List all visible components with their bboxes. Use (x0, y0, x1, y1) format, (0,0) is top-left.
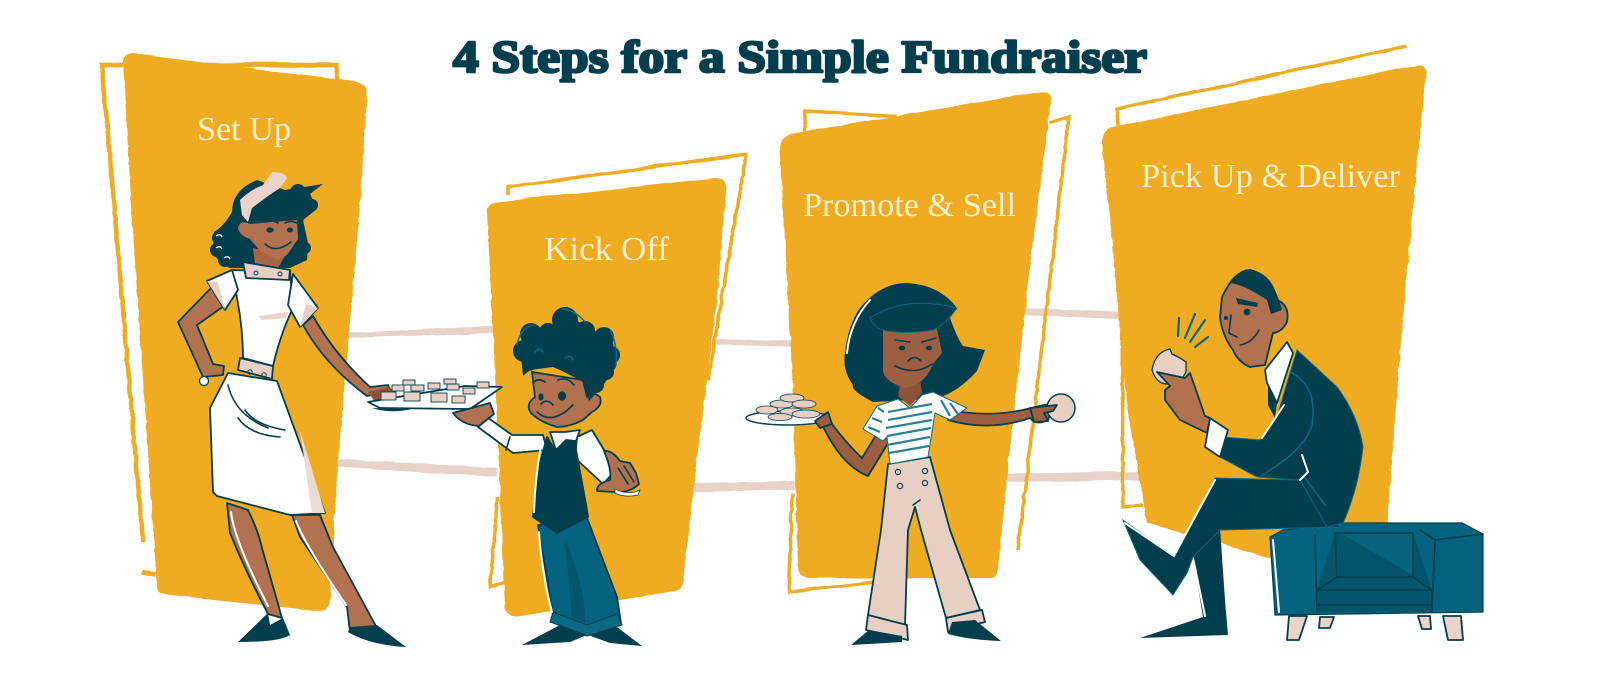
striped shirt (863, 392, 967, 464)
boy's facial features (533, 379, 574, 418)
girl's facial features (895, 338, 936, 371)
man's facial features (1224, 298, 1259, 345)
raised leg and shoe (1123, 478, 1340, 595)
character: man in suit on bench (1123, 270, 1483, 640)
woman's facial features (263, 221, 297, 249)
fringe hair (253, 192, 310, 222)
gold panel (1102, 65, 1426, 558)
bodice (232, 270, 293, 366)
gold panel (487, 178, 726, 617)
label: Pick Up and Deliver: Pick Up & Deliver (1141, 158, 1401, 195)
short hair (1222, 270, 1282, 314)
jacket (1220, 350, 1363, 527)
legs (227, 503, 282, 618)
shirt collar (1265, 342, 1293, 403)
gold panel (123, 53, 367, 611)
label: Promote and Sell: Promote & Sell (803, 187, 1016, 224)
raised arm sleeve (478, 417, 547, 453)
title: 4 Steps for a Simple Fundraiser (453, 32, 1147, 82)
collar (243, 262, 290, 280)
fringe (870, 303, 957, 332)
supporting leg and shoe (1140, 528, 1228, 638)
hand (1157, 372, 1210, 433)
label: Kick Off: Kick Off (544, 231, 670, 268)
brush frame (490, 154, 746, 587)
cookie in hand (1047, 394, 1075, 422)
brush frame (789, 111, 1069, 592)
panel: Kick Off (487, 154, 746, 617)
tray hand (368, 387, 396, 402)
bench (1270, 523, 1483, 640)
arm holding plate (820, 420, 890, 476)
motion lines by the cookie (1178, 314, 1208, 347)
right sleeve (575, 430, 616, 484)
connecting pink brush bands (336, 308, 1142, 492)
pants (538, 518, 621, 632)
head (1220, 270, 1288, 367)
brush frame (1117, 46, 1407, 507)
sleeves (207, 270, 238, 310)
character: girl with plate of cookies (746, 283, 1075, 645)
outstretched arm (303, 316, 390, 396)
collar (550, 430, 580, 450)
cookie with bite (1152, 349, 1186, 384)
face (238, 220, 298, 260)
brush frame (102, 65, 337, 574)
panel: Promote and Sell (780, 92, 1069, 592)
panel: Set Up (102, 53, 367, 611)
trousers (868, 457, 980, 625)
neck (253, 248, 285, 268)
face (529, 372, 601, 427)
shirt cuff (1205, 418, 1228, 457)
open hand (597, 451, 639, 492)
bench legs (1287, 616, 1463, 640)
pointing arm (948, 402, 1057, 426)
hair bow (240, 172, 287, 222)
shoes (851, 630, 902, 645)
vest (533, 433, 588, 533)
character: boy holding tray (453, 307, 642, 646)
skirt (210, 373, 325, 515)
label: Set Up: Set Up (197, 111, 291, 148)
character: woman in white dress holding tray (178, 172, 502, 647)
shoes (522, 625, 587, 645)
belt (238, 358, 273, 379)
plate of cookies (746, 394, 832, 428)
arm on hip (178, 287, 224, 377)
curly hair (513, 307, 620, 401)
hand under tray (453, 403, 494, 426)
gold panel (780, 92, 1051, 578)
panel: Pick Up and Deliver (1102, 46, 1426, 558)
back hair (844, 283, 985, 402)
tray with treats (368, 379, 502, 411)
shoes (238, 613, 290, 642)
back hair with curls (210, 180, 323, 268)
face (883, 329, 942, 388)
neck (898, 378, 922, 406)
